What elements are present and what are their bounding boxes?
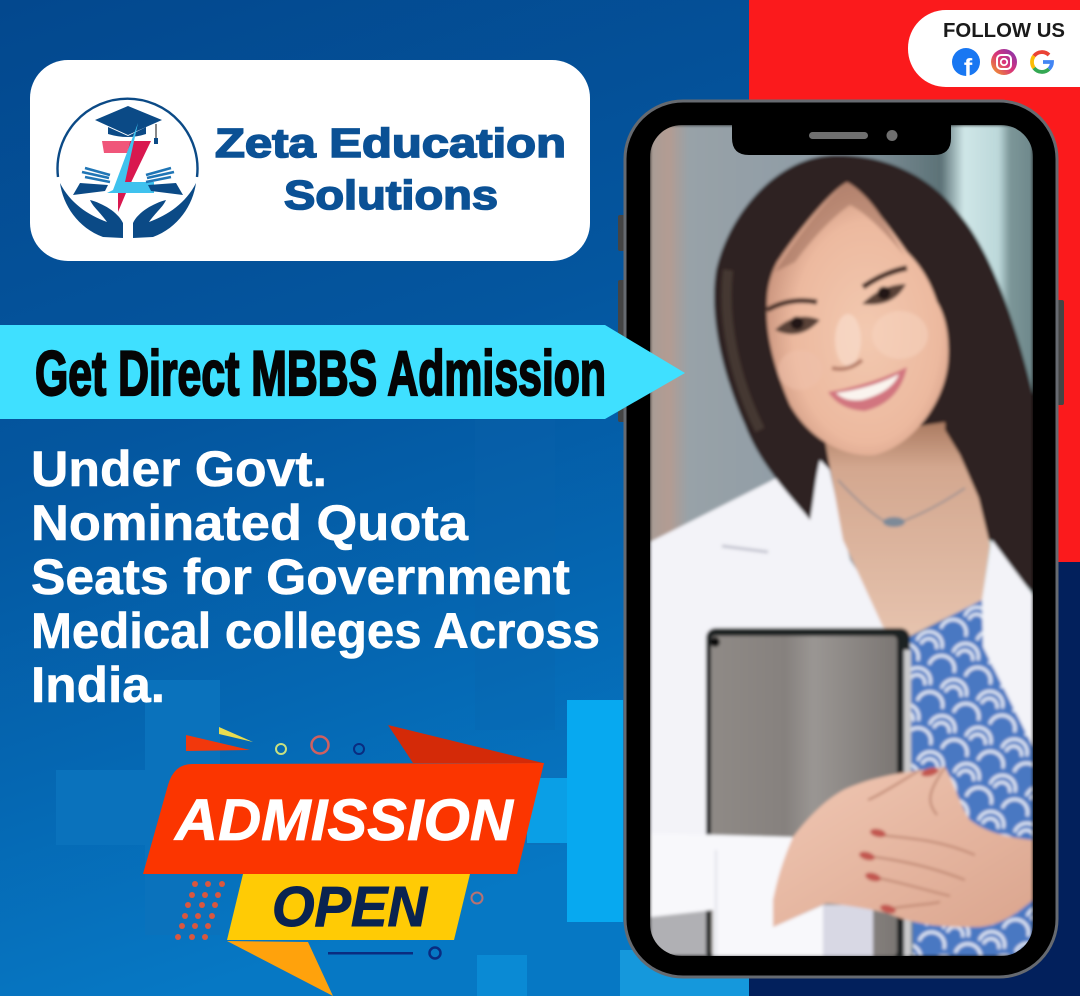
- background: navy panel: [749, 562, 1080, 996]
- hands: [773, 767, 1033, 927]
- body text: Medical colleges Across: [31, 603, 600, 659]
- body text: Seats for Government: [31, 549, 570, 605]
- sleeve: [703, 832, 825, 956]
- red ADMISSION panel: [143, 763, 544, 874]
- icon: Zeta logo: [58, 99, 198, 238]
- yellow OPEN panel: OPEN: [272, 875, 429, 939]
- yellow OPEN panel: [227, 874, 470, 940]
- patterned blouse: [910, 600, 1033, 956]
- Z letter: [102, 123, 154, 212]
- icon: facebook: f: [964, 54, 973, 82]
- eyebrows: [767, 301, 817, 310]
- icon: google: [1032, 52, 1052, 72]
- graduation cap: [95, 106, 162, 144]
- hands: [60, 183, 196, 238]
- forehead shadow: [775, 182, 905, 272]
- icon: instagram: [991, 49, 1017, 75]
- nails: [858, 766, 940, 915]
- necklace: [838, 480, 965, 525]
- logo card: [30, 60, 590, 261]
- phone mockup: [618, 101, 1064, 977]
- icon: facebook: [952, 48, 980, 82]
- neck and chest: [825, 420, 990, 636]
- body text: [31, 441, 600, 713]
- lips and teeth: [828, 367, 907, 411]
- phone notch: [732, 124, 951, 155]
- body text: Under Govt.: [31, 441, 327, 497]
- eyes: [775, 317, 820, 334]
- photo: doctor holding tablet: [650, 125, 1033, 968]
- banner: direct admission arrow: [0, 325, 685, 419]
- red ADMISSION panel: ADMISSION: [173, 788, 514, 853]
- dot pattern: [175, 881, 225, 940]
- orange ribbon tail: [227, 941, 333, 996]
- cheeks and nose highlights: [835, 314, 861, 366]
- banner heading: Get Direct MBBS Admission: [35, 339, 606, 409]
- body text: Nominated Quota: [31, 495, 469, 551]
- open book: [73, 168, 183, 195]
- nose: [832, 360, 862, 369]
- hair back: [714, 155, 1033, 592]
- background: blue panel: [0, 0, 750, 996]
- red ribbon fold: [388, 725, 543, 763]
- brand name: Solutions: [284, 172, 498, 218]
- follow us label: FOLLOW US: [943, 20, 1065, 42]
- brand name: Zeta Education: [215, 120, 566, 166]
- side buttons: [618, 215, 1064, 422]
- collar right: [982, 540, 1033, 752]
- white coat: [650, 458, 886, 836]
- follow us badge: [908, 10, 1080, 87]
- face: [767, 182, 948, 455]
- phone body: [625, 101, 1057, 977]
- front hair right: [943, 418, 981, 497]
- brand name: [215, 120, 566, 218]
- admission open badge: [143, 725, 544, 996]
- decorative confetti: [186, 727, 482, 958]
- tablet: [706, 628, 911, 968]
- body text: India.: [31, 657, 165, 713]
- background: red panel: [749, 0, 1080, 562]
